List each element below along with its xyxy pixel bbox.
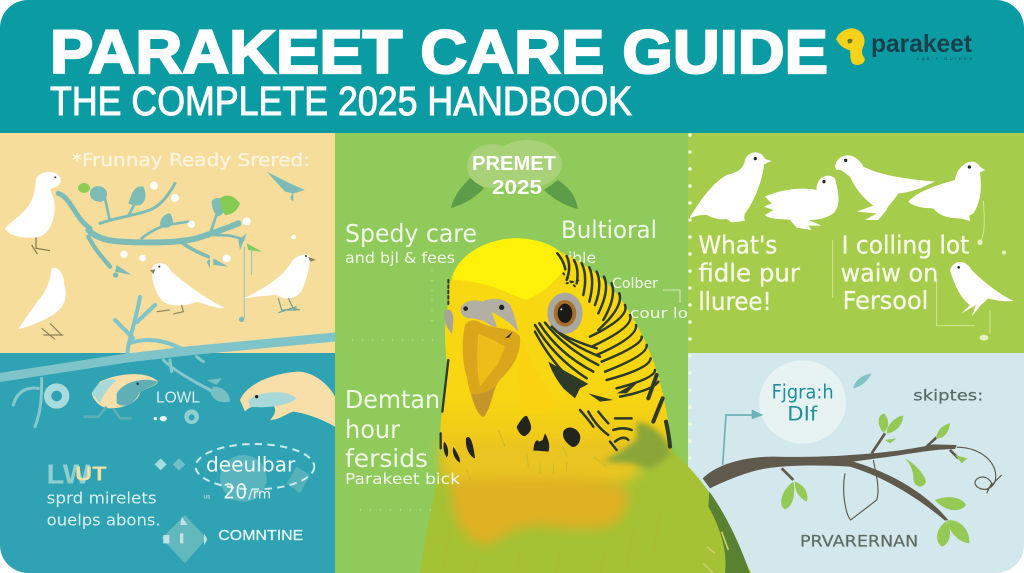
text: bultioral: Colber	[612, 276, 658, 292]
icon: diamond cluster	[162, 515, 207, 563]
bird group	[690, 152, 1014, 317]
head	[440, 238, 672, 460]
text: demtan hour	[345, 385, 460, 488]
black cheek patch	[548, 362, 588, 398]
bird eyes	[754, 157, 971, 269]
text: bultioral: Bultioral	[561, 216, 657, 244]
label prvarernan: PRVARERNAN	[800, 532, 918, 551]
text: what's: What's	[698, 230, 777, 259]
text: demtan hour: fersids	[345, 444, 428, 473]
badge: premet 2025	[451, 140, 578, 209]
hanging twig	[13, 357, 217, 427]
chest feather lines	[443, 430, 660, 573]
bird: top left	[5, 172, 61, 254]
black barring	[441, 253, 670, 450]
label COMNTINE: COMNTINE	[218, 528, 304, 544]
throat spots	[443, 416, 580, 463]
text: i colling: I colling lot	[842, 230, 970, 259]
logo wordmark: parakeet	[871, 30, 973, 58]
badge: premet 2025: PREMET	[472, 153, 556, 175]
text: speedy care	[346, 223, 476, 266]
pale panel artwork	[703, 360, 1002, 551]
text: bultioral: ible	[568, 249, 596, 267]
neck blend	[438, 443, 640, 493]
text: i colling: waiw on	[841, 259, 938, 288]
text: demtan hour: hour	[345, 415, 401, 444]
text: speedy care: Spedy care	[345, 219, 477, 248]
parakeet illustration	[420, 238, 752, 573]
icon: feather	[853, 373, 872, 388]
icon: logo bird	[837, 30, 864, 64]
decorative dots	[120, 182, 296, 262]
text: what's: fidle pur	[698, 259, 801, 288]
panel: top left cream	[0, 133, 335, 353]
speech bubble: Fjgra:h	[772, 380, 834, 403]
cream bird: center	[83, 374, 158, 418]
text: speedy care: and bjl & fees	[345, 249, 455, 267]
text: bultioral: cour lo	[630, 306, 688, 322]
logo tagline: LAB + GUIDES	[917, 56, 972, 61]
bird: center	[150, 263, 225, 314]
branch with leaves	[703, 413, 1002, 547]
text: bultioral	[561, 216, 688, 322]
thin connector lines	[833, 201, 990, 333]
title: PARAKEET CARE GUIDE	[50, 18, 828, 86]
callout: dashed ellipse with figures: /rm	[248, 487, 271, 502]
callout: dashed ellipse with figures: us	[203, 493, 210, 500]
label skiptes: skiptes:	[913, 387, 983, 405]
parakeet body	[420, 450, 752, 573]
text: demtan hour: Parakeet bick	[345, 470, 460, 488]
top right panel artwork	[690, 152, 1014, 341]
panel: bottom right pale blue	[688, 353, 1024, 573]
text: what's	[698, 230, 801, 316]
chest bib	[451, 478, 628, 545]
header band	[0, 0, 1024, 133]
dots	[154, 416, 167, 421]
label LOWL: LOWL	[156, 389, 200, 406]
small icon dot	[184, 409, 199, 424]
callout: dashed ellipse with figures	[196, 444, 314, 503]
cream panel artwork	[5, 172, 316, 339]
leaves behind badge	[451, 178, 578, 209]
badge: premet 2025: 2025	[492, 177, 542, 199]
label LWT: UT	[75, 464, 107, 486]
diamonds	[155, 458, 185, 470]
text block	[48, 492, 159, 529]
speech bubble	[759, 360, 846, 444]
back feathers	[708, 492, 750, 573]
logo	[837, 30, 973, 64]
callout: dashed ellipse with figures: 20	[223, 479, 247, 503]
speech bubble: DIf	[787, 403, 819, 426]
branch crossing between left panels	[0, 297, 335, 378]
text block: sprd mirelets	[47, 488, 157, 507]
bird: right	[243, 255, 316, 313]
cere and nostrils	[444, 299, 518, 338]
beak	[463, 320, 520, 417]
label LWT: LW	[47, 458, 91, 489]
cheek patch	[519, 337, 560, 413]
text block: ouelps abons.	[47, 510, 161, 529]
panel: top right green	[688, 133, 1024, 353]
speckle texture	[352, 270, 440, 510]
text: i colling	[841, 230, 970, 315]
cream bird: right	[240, 372, 335, 427]
callout: dashed ellipse with figures: deeulbar	[206, 453, 296, 477]
branch with leaves	[58, 172, 305, 322]
connector end blobs	[977, 240, 1006, 341]
panel: middle green	[335, 133, 688, 573]
text: what's: lluree!	[698, 287, 772, 316]
crown	[453, 238, 565, 300]
panel: bottom left teal	[0, 353, 335, 573]
text: demtan hour: Demtan	[345, 385, 440, 414]
bird: bottom left	[18, 268, 66, 339]
label LWT	[48, 464, 106, 484]
text: i colling: Fersool	[843, 286, 928, 315]
wing shading	[603, 422, 672, 468]
subtitle: THE COMPLETE 2025 HANDBOOK	[50, 78, 632, 124]
divider dots	[688, 135, 692, 470]
bright back streaks	[703, 532, 728, 573]
teal panel artwork	[13, 357, 335, 563]
arrow to bubble	[723, 409, 763, 465]
panel heading: *Frunnay Ready Srered:	[72, 150, 310, 171]
eye	[547, 293, 583, 334]
